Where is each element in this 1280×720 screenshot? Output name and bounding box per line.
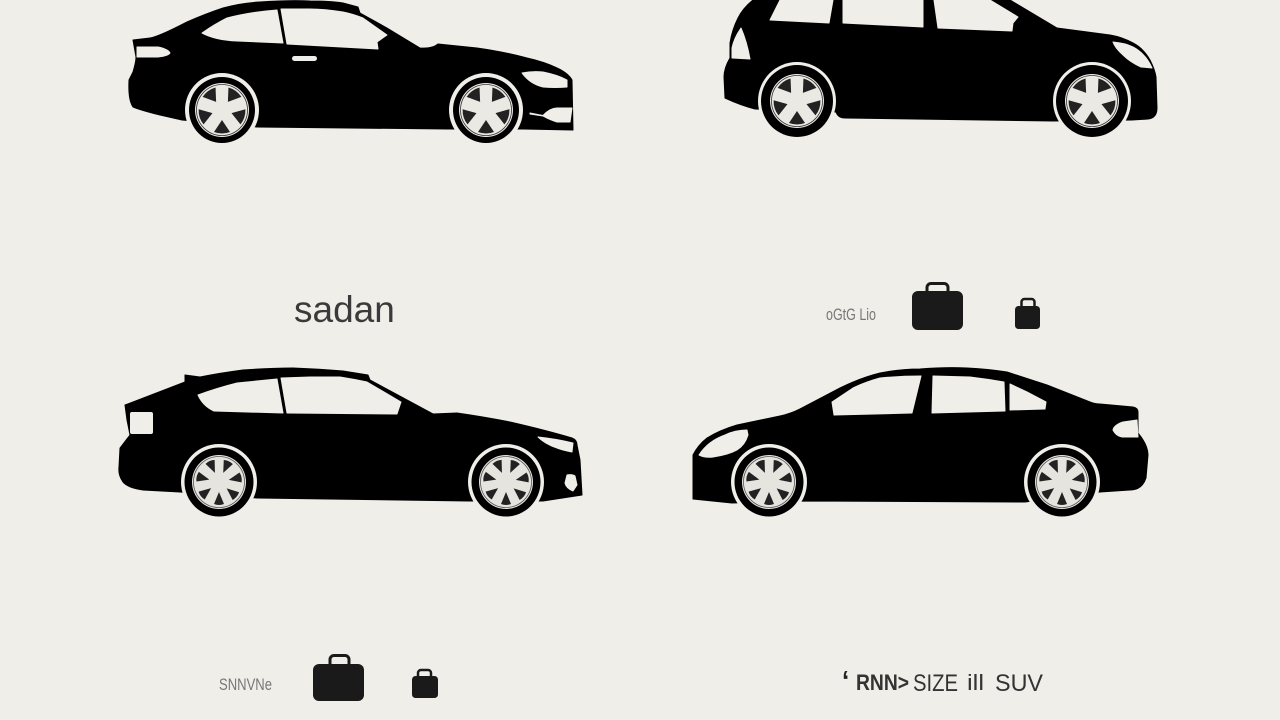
label: size in SUV caption: ‘ <box>842 665 849 695</box>
car: top-left coupe silhouette <box>129 1 573 147</box>
label: size in SUV caption <box>842 665 1043 697</box>
car: bottom-right sedan silhouette <box>693 368 1148 520</box>
car: top-right hatchback silhouette <box>724 0 1157 140</box>
label: garbled luggage caption, top right: oGtG Lio <box>826 305 876 324</box>
label: size in SUV caption: SUV <box>995 670 1043 697</box>
icon: large suitcase, top right <box>912 284 963 330</box>
icon: small suitcase, bottom left <box>412 670 438 698</box>
label: size in SUV caption: ill <box>967 670 984 695</box>
label: garbled luggage caption, bottom left: SNNVNe <box>219 675 272 694</box>
car: bottom-left fastback silhouette <box>119 368 582 520</box>
icon: large suitcase, bottom left <box>313 656 364 701</box>
label: size in SUV caption: SIZE <box>913 670 958 697</box>
icon: small suitcase, top right <box>1015 299 1040 329</box>
label: sadan: sadan <box>294 289 395 330</box>
label: size in SUV caption: RNN> <box>856 670 909 695</box>
